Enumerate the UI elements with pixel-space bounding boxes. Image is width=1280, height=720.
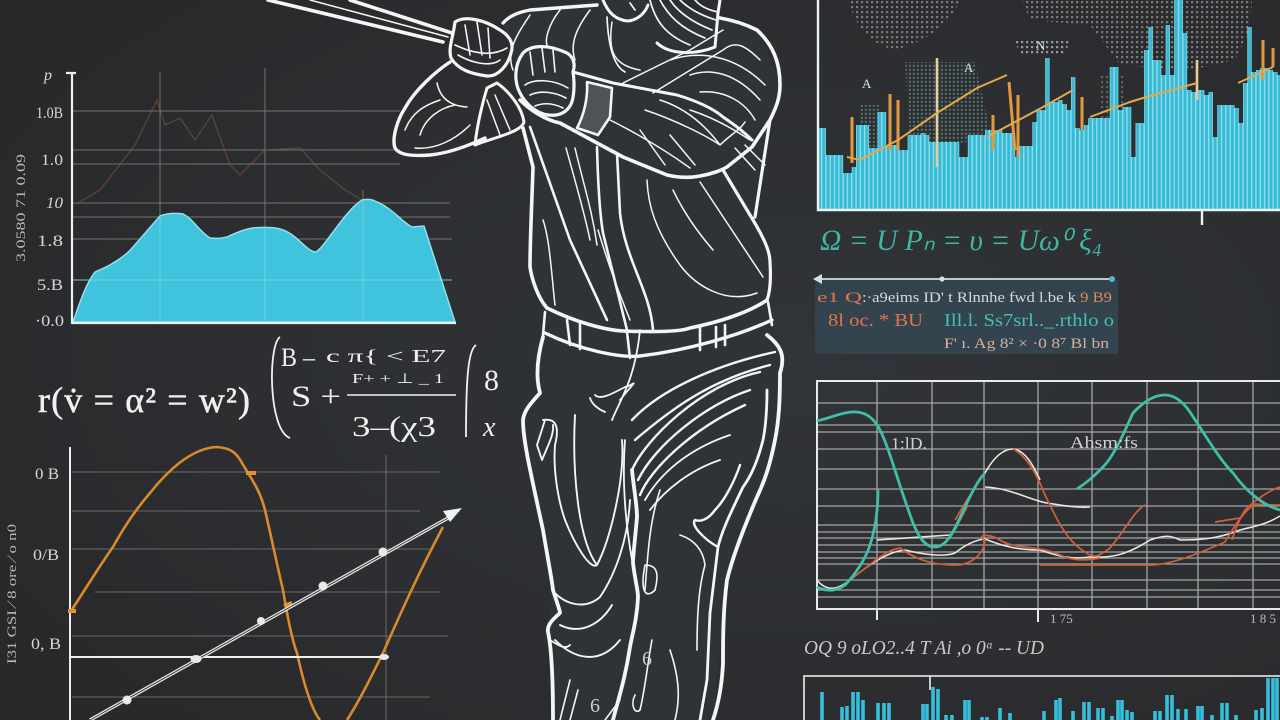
axis labels: p [43, 67, 52, 84]
cyan area fill [73, 199, 455, 322]
x tick labels: 1 75 [1050, 611, 1073, 626]
right leg outline [713, 335, 782, 720]
panel: handwritten formula: B – [281, 343, 316, 372]
panel: handwritten formula: F+ + ⊥ _ 1 [352, 372, 444, 387]
panel: annotation band [813, 274, 1118, 354]
pants folds [632, 352, 775, 495]
shirt placket and folds [530, 127, 653, 330]
row three: F' ı. Ag 8² × ·0 8⁷ Bl bn [944, 336, 1110, 352]
x tick labels: 1 8 5 [1250, 611, 1276, 626]
lower fist [516, 47, 574, 115]
panel: handwritten formula: x [482, 412, 496, 443]
axis labels: 1.0B [36, 105, 63, 122]
belt [547, 300, 767, 332]
small map labels [862, 38, 1046, 91]
left leg outline [523, 337, 560, 720]
orange curve [71, 447, 443, 720]
panel: annotation band: Ill.l. Ss7srl.._.rthlo o [944, 310, 1114, 330]
axis labels [35, 67, 64, 330]
panel: lower caption: OQ 9 oLO2..4 T Ai ,o 0ᵅ -- UD [804, 637, 1045, 659]
panel: handwritten formula: S + [291, 380, 341, 413]
panel: handwritten formula: 3–(χ3 [352, 412, 436, 443]
wristband [577, 82, 612, 135]
panel: annotation band: :·a9eims ID' t Rlnnhe fwd l.be k 9 B9 [862, 290, 1112, 306]
small map labels: N [1036, 38, 1046, 53]
axes [66, 73, 456, 323]
axis labels: 1.0 [41, 152, 63, 169]
horizontal marker line [71, 656, 386, 658]
panel: handwritten formula: 8 [484, 364, 499, 397]
rotated axis title: I31 GSI ∕ 8 ore ∕ o n0 [4, 524, 19, 664]
bars [820, 0, 1280, 210]
panel: line chart with grid [817, 381, 1280, 626]
dotted map backdrop [848, 0, 1252, 170]
white line series [817, 449, 1280, 588]
bars [822, 678, 1277, 720]
shoulder and chest [503, 5, 597, 23]
panel: handwritten formula: c π{ < E7 [326, 346, 446, 366]
axis labels: 0, B [31, 636, 61, 653]
x tick labels [1050, 611, 1276, 626]
double ended rule [817, 278, 1112, 280]
trend line [847, 67, 1273, 160]
row two: 8l oc. * BU [828, 310, 923, 330]
chart annotations [891, 433, 1138, 453]
panel: handwritten formula [38, 337, 499, 443]
frame [817, 381, 1280, 622]
frame [804, 676, 1280, 720]
grid [817, 381, 1280, 609]
axis line [69, 447, 71, 720]
neck and head [603, 0, 720, 53]
panel: sine and arrow chart [4, 447, 462, 720]
bat [268, 0, 452, 42]
teal curve [817, 395, 1280, 547]
chart annotations: Ahsm:fs [1070, 433, 1138, 452]
panel: bar chart with map backdrop [818, 0, 1280, 225]
faint orange ghost line [78, 100, 362, 203]
axis labels: 1.8 [37, 233, 63, 250]
small map labels: A [862, 76, 872, 91]
row one: e1 Q [817, 290, 862, 306]
chart annotations: 1:lD. [891, 434, 927, 453]
panel: batter figure: 6 [590, 695, 600, 717]
panel: bottom bar chart [804, 676, 1280, 720]
left arm and elbow [394, 62, 485, 155]
axis labels: 10 [46, 195, 63, 212]
upper fist [450, 19, 512, 76]
torso and leg tint [503, 0, 780, 720]
axis labels: ·0.0 [35, 313, 64, 330]
rotated axis title: 3.0580 71 0.09 [13, 154, 28, 262]
axis labels: 0/B [33, 547, 59, 564]
panel: area chart [13, 67, 456, 330]
forearm and right arm outline [573, 72, 752, 140]
axis labels: 5.B [37, 277, 63, 294]
orange line series [850, 449, 1280, 580]
panel: batter figure [268, 0, 782, 720]
small map labels: A [964, 60, 974, 75]
frame [818, 0, 1280, 225]
panel: teal equation: Ω = U Pₙ = υ = Uω⁰ ξ₄ [820, 224, 1102, 257]
panel: handwritten formula: r(v̇ = α² = w²) [38, 380, 250, 420]
torso outline [523, 128, 547, 308]
axis labels: 0 B [35, 466, 59, 483]
axis labels [31, 466, 61, 653]
orange spikes [852, 40, 1273, 163]
arrow with markers [90, 508, 462, 720]
inner seam [613, 470, 638, 720]
panel: batter figure: 6 [642, 648, 652, 670]
